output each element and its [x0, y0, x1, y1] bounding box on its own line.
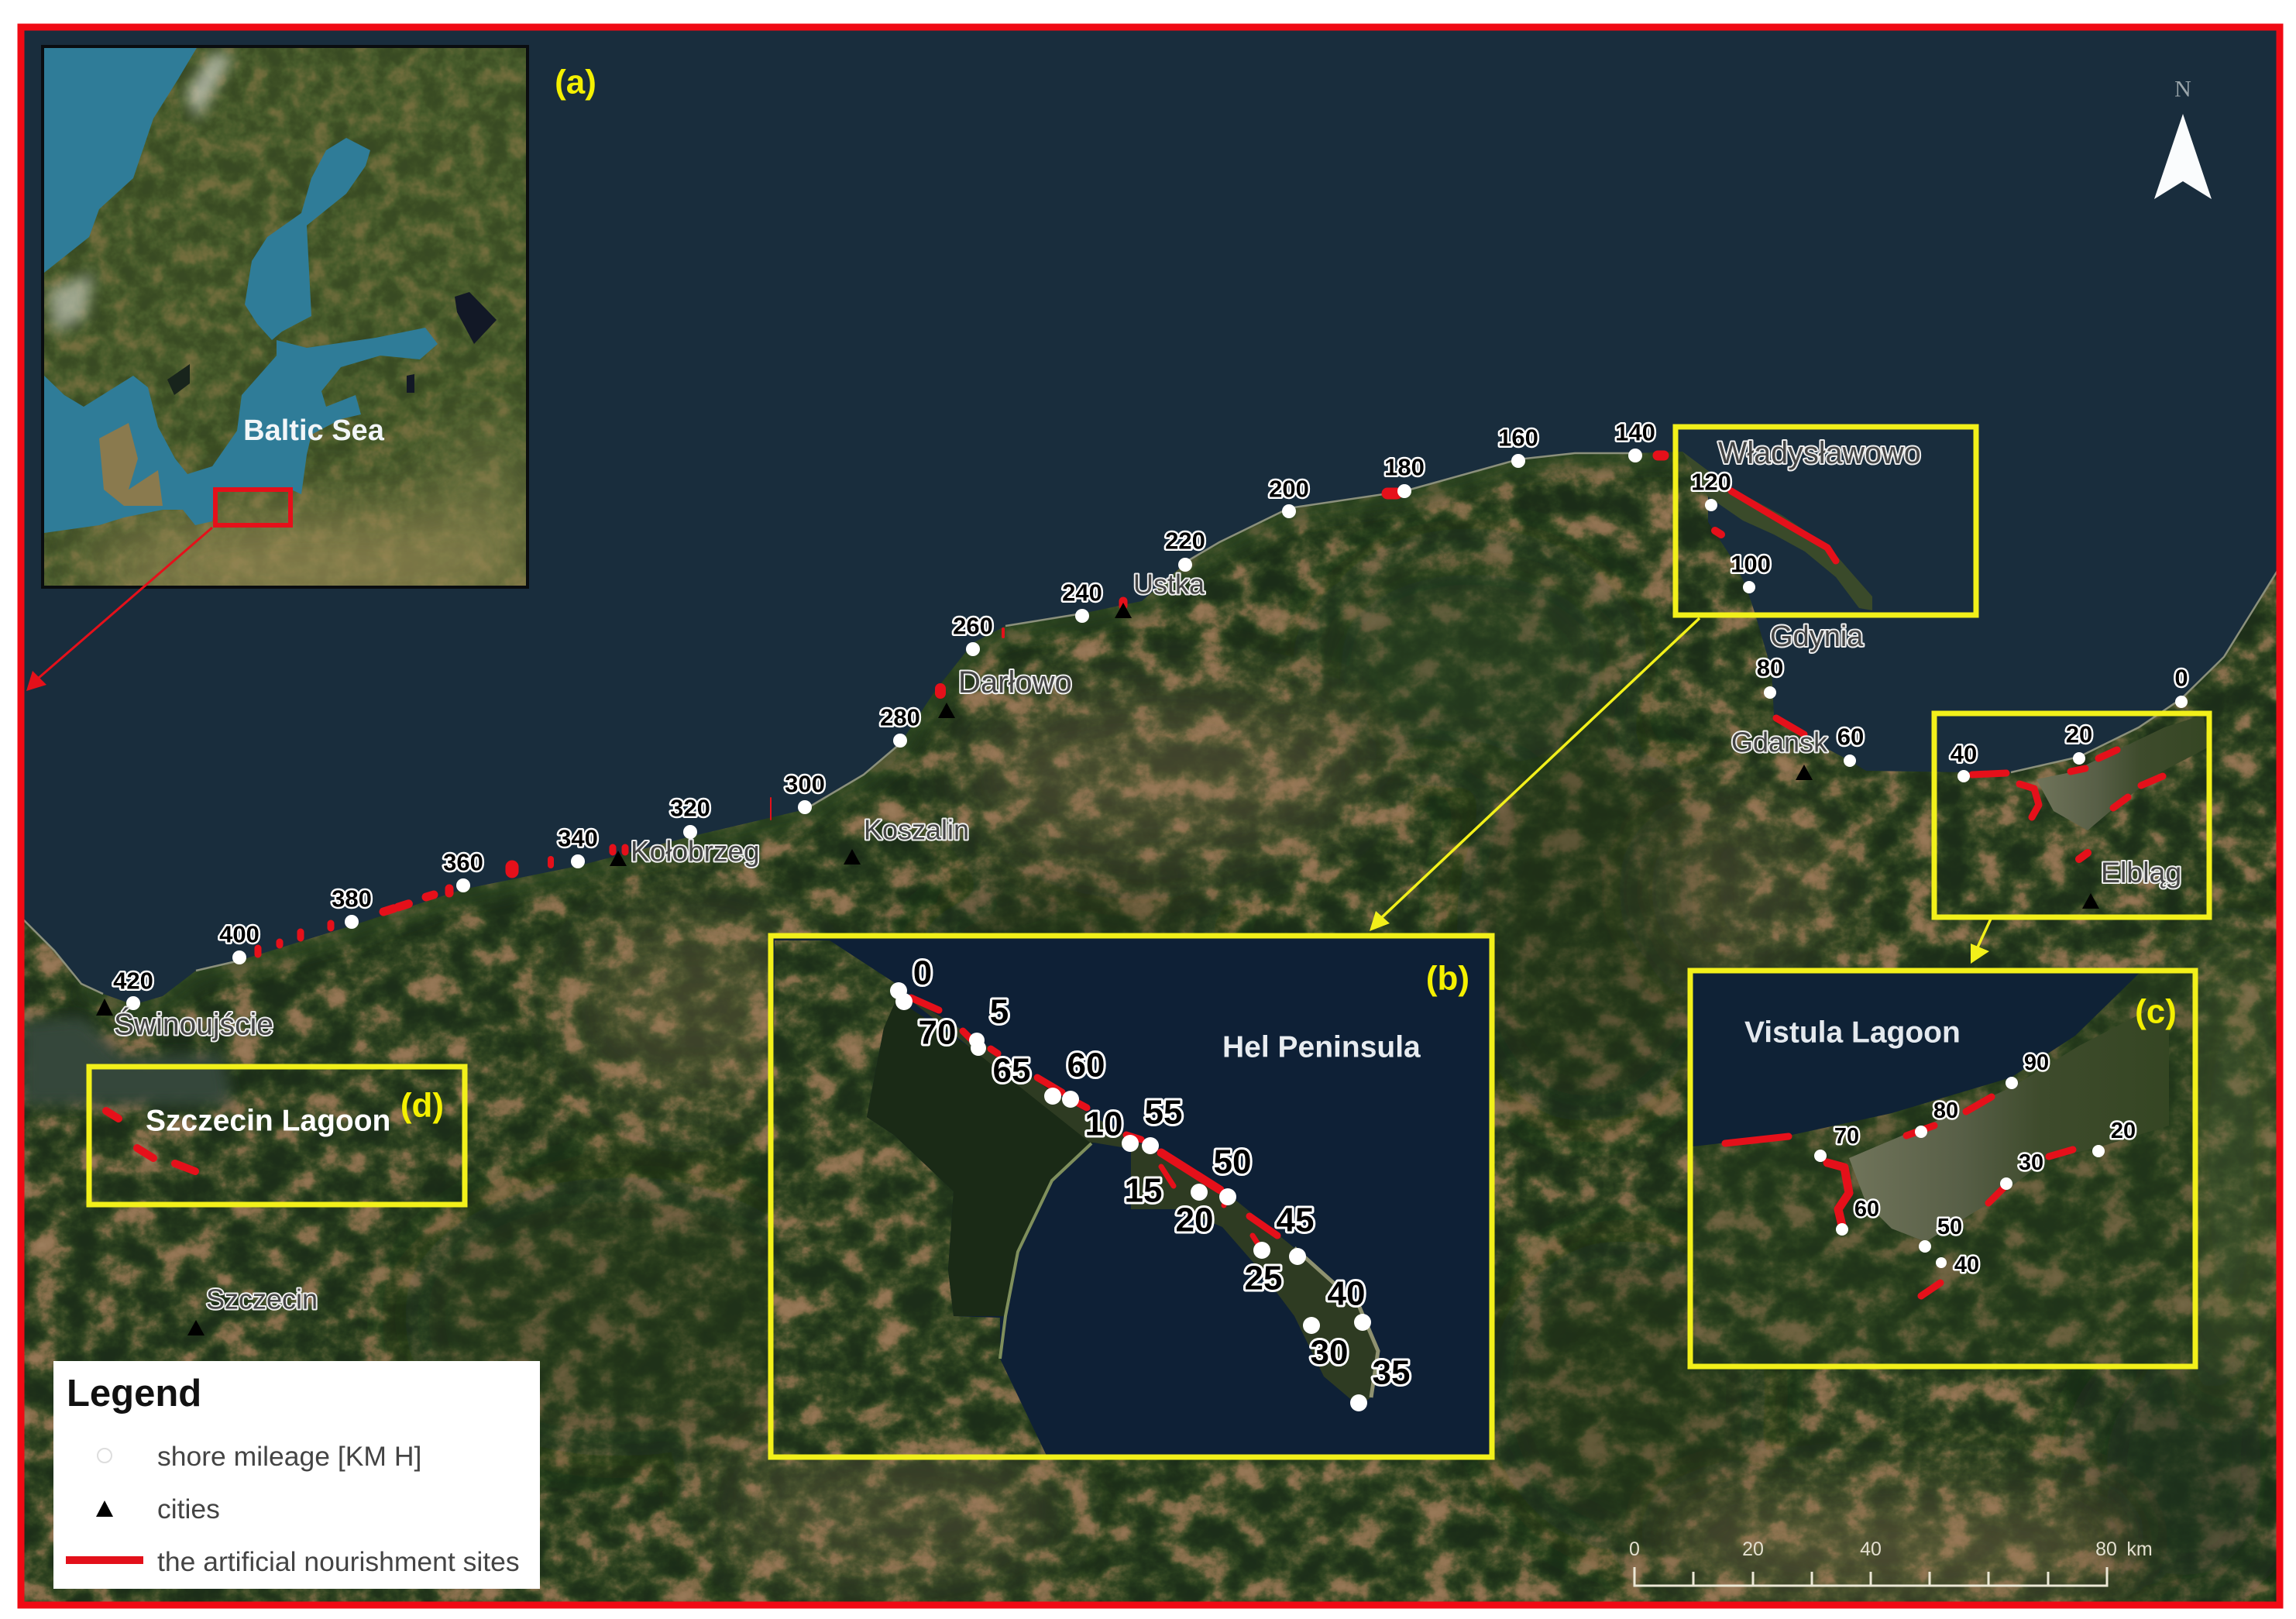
- mileage markers in inset c: 40: [1954, 1253, 1979, 1277]
- scale bar: 40: [1860, 1538, 1882, 1560]
- mileage markers in inset c: 70: [1834, 1124, 1859, 1149]
- yellow locator box: Hel area: [1676, 427, 1976, 615]
- Hel peninsula on main map: [1682, 452, 1872, 610]
- red locator rectangle: [215, 490, 290, 525]
- shore mileage markers: 360: [443, 849, 483, 875]
- Lake Ladoga: [455, 292, 497, 344]
- city names: Kołobrzeg: [631, 835, 760, 868]
- inset c sea: [1690, 971, 2142, 1146]
- shore mileage markers: [113, 418, 2188, 1010]
- shore mileage markers: 220: [1165, 527, 1205, 555]
- city names: Władysławowo: [1718, 436, 1921, 470]
- Puck lagoon: [1708, 522, 1709, 524]
- mileage markers in inset c: 20: [2111, 1119, 2136, 1143]
- mileage dots in inset b: [890, 982, 1371, 1411]
- city names: Darłowo: [958, 665, 1072, 700]
- mileage labels in inset b: 45: [1277, 1201, 1314, 1239]
- city markers: [96, 603, 2099, 1335]
- shore mileage markers: 280: [880, 703, 920, 731]
- green coastal strip: [81, 452, 1682, 1005]
- city names: Gdansk: [1731, 727, 1828, 758]
- shore mileage markers: 120: [1691, 468, 1731, 496]
- scale bar: km: [2126, 1538, 2153, 1560]
- shore mileage markers: 260: [953, 612, 993, 640]
- land with satellite-like terrain: [15, 434, 2293, 1611]
- panel (d): Szczecin Lagoon box: [89, 1067, 465, 1205]
- mileage markers in inset c: [1814, 1050, 2136, 1277]
- city names: Szczecin: [206, 1283, 318, 1315]
- shore mileage markers: 140: [1615, 418, 1655, 446]
- mileage labels in inset b: 10: [1085, 1105, 1122, 1143]
- north arrow: N: [2174, 76, 2191, 102]
- mileage labels in inset b: 50: [1214, 1143, 1251, 1181]
- shore mileage markers: 0: [2174, 665, 2188, 691]
- inset b mainland: [771, 936, 1081, 1457]
- legend item: nourishment sites: the artificial nourishment sites: [157, 1546, 520, 1577]
- mileage labels in inset b: 30: [1311, 1334, 1348, 1371]
- Baltic proper and Gulf of Finland: [44, 328, 438, 533]
- shore mileage markers: 200: [1269, 476, 1309, 502]
- scale bar: 20: [1742, 1538, 1764, 1560]
- mileage labels in inset b: 55: [1145, 1094, 1182, 1131]
- Szczecin lagoon water: [22, 1017, 232, 1105]
- city names: [114, 436, 2181, 1315]
- yellow locator box: Vistula area: [1934, 713, 2209, 917]
- legend item: shore mileage: shore mileage [KM H]: [157, 1441, 421, 1472]
- label: Hel Peninsula: Hel Peninsula: [1222, 1030, 1421, 1064]
- shore mileage markers: 60: [1837, 724, 1864, 750]
- shore mileage markers: 40: [1951, 741, 1977, 767]
- legend title: Legend: [67, 1373, 201, 1414]
- mileage labels in inset b: 40: [1328, 1275, 1365, 1312]
- mileage labels in inset b: 65: [993, 1052, 1030, 1089]
- mileage labels in inset b: 5: [990, 993, 1009, 1030]
- panel letter d: (d): [400, 1086, 444, 1125]
- mileage labels in inset b: 20: [1176, 1201, 1213, 1239]
- scale bar: 0: [1629, 1538, 1640, 1560]
- panel (c): Vistula Lagoon inset: [1690, 971, 2195, 1366]
- scale bar: 80: [2095, 1538, 2117, 1560]
- shore mileage markers: 300: [785, 770, 825, 798]
- mileage labels in inset b: 0: [913, 954, 932, 992]
- inset a frame: [43, 46, 528, 587]
- Vistula lagoon: [1849, 999, 2169, 1242]
- legend item: cities: [96, 1494, 220, 1524]
- shore mileage markers: 180: [1384, 454, 1425, 480]
- shore mileage markers: 100: [1731, 550, 1771, 578]
- arrow: Hel locator to inset b: [1370, 618, 1700, 931]
- arrow: inset a to main map: [26, 528, 212, 691]
- Gulf of Bothnia: [245, 138, 370, 340]
- shore mileage markers: 420: [113, 967, 153, 995]
- legend: [53, 1361, 540, 1589]
- mileage labels in inset b: 70: [919, 1013, 956, 1052]
- shore mileage markers: 320: [670, 795, 710, 821]
- city names: Gdynia: [1770, 620, 1864, 653]
- city names: Elbląg: [2101, 856, 2181, 889]
- panel letter a: (a): [555, 64, 596, 101]
- city names: Koszalin: [864, 813, 969, 846]
- shore mileage markers: 160: [1498, 425, 1538, 451]
- shore mileage markers: 340: [558, 824, 598, 852]
- panel letter b: (b): [1426, 959, 1469, 998]
- Vistula lagoon water: [2036, 715, 2209, 830]
- scale bar: [1629, 1538, 2153, 1586]
- mileage labels in inset b: 15: [1125, 1171, 1162, 1210]
- mileage markers in inset c: 60: [1854, 1197, 1879, 1222]
- mileage labels in inset b: 60: [1067, 1046, 1105, 1084]
- shore mileage markers: 20: [2066, 720, 2092, 748]
- panel (b): Hel Peninsula inset: [771, 936, 1492, 1457]
- label: Baltic Sea: Baltic Sea: [243, 414, 385, 447]
- shore mileage markers: 400: [219, 920, 260, 948]
- peninsula: [899, 991, 1378, 1406]
- mileage markers in inset c: 90: [2024, 1050, 2049, 1075]
- nourishment sites along the main coast: [106, 455, 2163, 1171]
- shore mileage markers: 80: [1757, 654, 1783, 682]
- mileage labels in inset b: [913, 954, 1410, 1391]
- label: Vistula Lagoon: Vistula Lagoon: [1744, 1016, 1961, 1049]
- overview inset: Baltic Sea region: [43, 46, 542, 620]
- mileage markers in inset c: 30: [2019, 1150, 2043, 1175]
- North Sea and Norwegian Sea: [43, 46, 198, 273]
- shore mileage markers: 240: [1062, 579, 1102, 606]
- Puck lagoon dark water: [867, 999, 1126, 1316]
- city names: Świnoujście: [114, 1007, 273, 1041]
- shore mileage markers: 380: [332, 885, 372, 913]
- sand bar: [1000, 1143, 1091, 1359]
- mileage labels in inset b: 25: [1245, 1260, 1282, 1297]
- label: Szczecin Lagoon: Szczecin Lagoon: [146, 1105, 390, 1137]
- red sites in inset b: [911, 998, 1277, 1246]
- arrow: Vistula locator to inset c: [1971, 917, 1992, 964]
- inset a land: [43, 46, 528, 587]
- north arrow: [2154, 76, 2212, 199]
- red sites in inset c: [1725, 1097, 2073, 1296]
- mountains: [48, 53, 232, 333]
- mileage markers in inset c: 50: [1937, 1215, 1962, 1239]
- mileage markers in inset c: 80: [1933, 1098, 1958, 1123]
- pale shoreline: [22, 453, 2280, 994]
- Denmark: [99, 423, 163, 506]
- mileage labels in inset b: 35: [1373, 1354, 1410, 1391]
- panel letter c: (c): [2135, 993, 2177, 1030]
- inset c land: [1690, 971, 2195, 1366]
- legend item: cities: cities: [157, 1494, 220, 1524]
- inset b sea: [771, 936, 1492, 1457]
- city names: Ustka: [1133, 569, 1205, 600]
